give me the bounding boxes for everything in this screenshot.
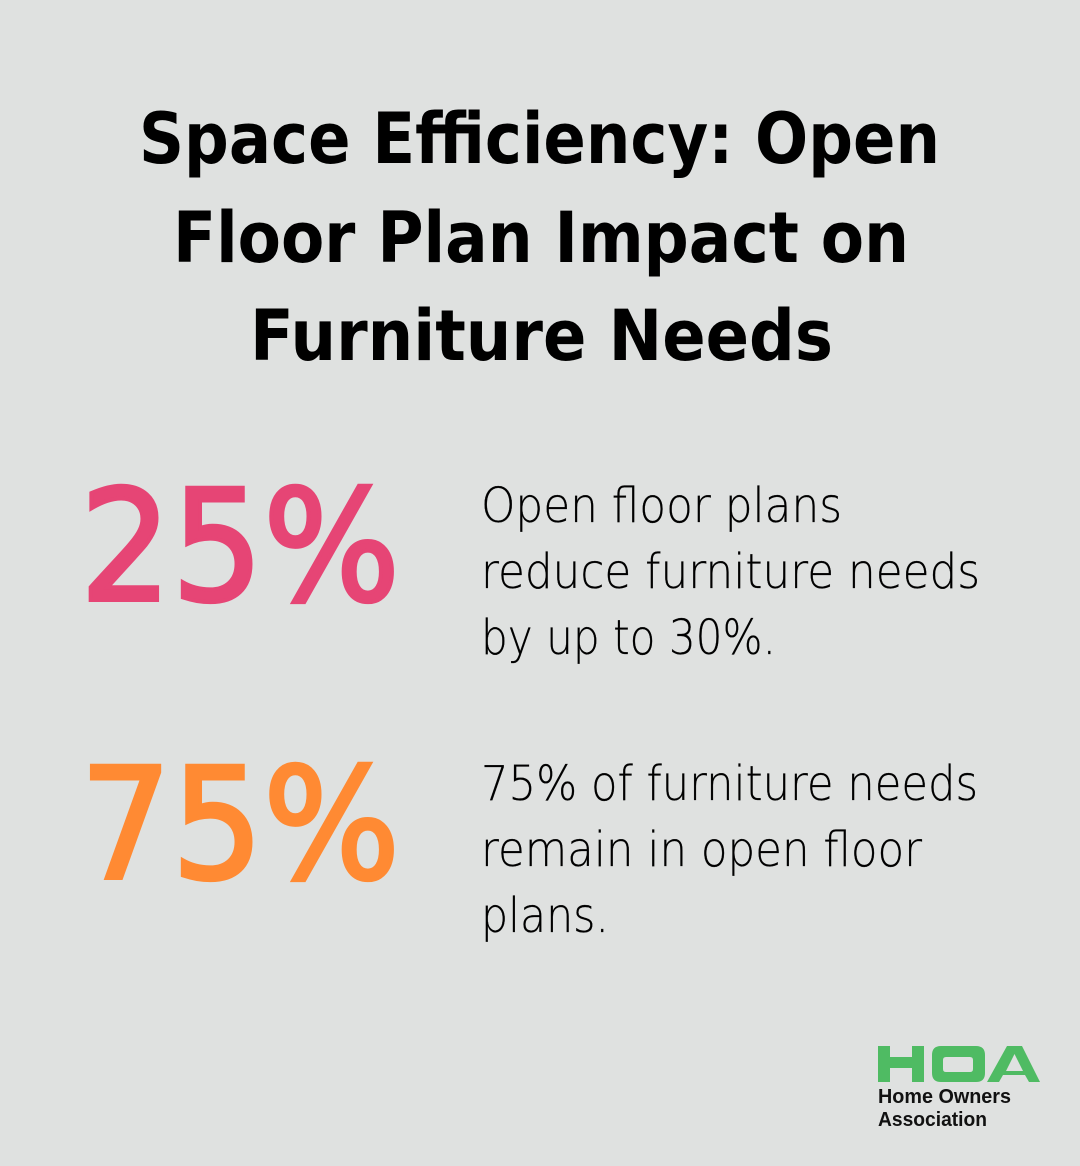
- text block: second statistic description: 75% of furniture needs: [481, 756, 978, 812]
- logo: HOA Home Owners Association: Association: [878, 1109, 987, 1131]
- stat: 75%: 75%: [80, 736, 400, 915]
- text block: first statistic description: [481, 478, 980, 666]
- text block: first statistic description: by up to 30%.: [481, 610, 776, 666]
- title: [139, 98, 940, 377]
- logo: HOA Home Owners Association: Home Owners: [878, 1086, 1011, 1108]
- title: Floor Plan Impact on: [173, 197, 909, 279]
- text block: second statistic description: [481, 756, 978, 944]
- logo mark: HOA letters: [878, 1046, 1040, 1082]
- text block: second statistic description: plans.: [481, 888, 609, 944]
- stat: 25%: 25%: [80, 458, 400, 637]
- text block: second statistic description: remain in open floor: [481, 822, 922, 878]
- text block: first statistic description: Open floor plans: [481, 478, 842, 534]
- title: Space Efficiency: Open: [139, 98, 940, 180]
- title: Furniture Needs: [250, 295, 833, 377]
- text block: first statistic description: reduce furniture needs: [481, 544, 980, 600]
- logo: HOA Home Owners Association: [878, 1046, 1040, 1131]
